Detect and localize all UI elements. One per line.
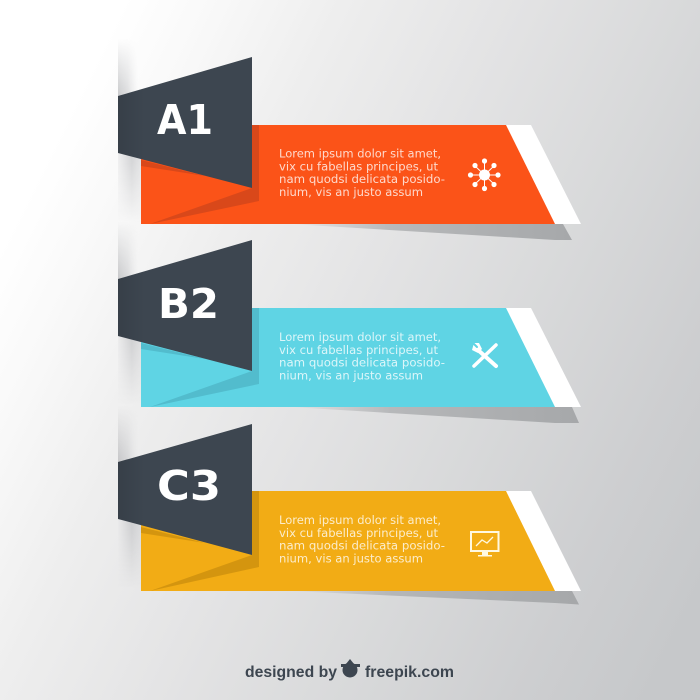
text B2: nium, vis an justo assum bbox=[279, 369, 423, 382]
text C3: vix cu fabellas principes, ut bbox=[279, 527, 439, 540]
credit text left: designed by bbox=[245, 664, 337, 681]
ground shadow B2 bbox=[290, 407, 579, 423]
banner B2 bbox=[118, 222, 581, 423]
text C3: nium, vis an justo assum bbox=[279, 552, 423, 565]
text A1: nam quodsi delicata posido- bbox=[279, 173, 445, 186]
text B2: nam quodsi delicata posido- bbox=[279, 356, 445, 370]
label A1: A1 bbox=[157, 96, 213, 144]
blue ribbon B2 bbox=[141, 308, 555, 407]
text B2: vix cu fabellas principes, ut bbox=[279, 344, 439, 357]
label B2: B2 bbox=[158, 280, 219, 328]
text A1: vix cu fabellas principes, ut bbox=[279, 160, 439, 173]
fold shadow strip A1 bbox=[118, 48, 141, 207]
text C3: Lorem ipsum dolor sit amet, bbox=[279, 514, 441, 527]
banner C3 bbox=[118, 406, 581, 604]
fold shadows A1 bbox=[141, 125, 259, 224]
white ribbon edge B2 bbox=[500, 308, 581, 407]
dark tab B2 bbox=[118, 240, 252, 371]
footer credit bbox=[245, 659, 454, 681]
fold shadow strip B2 bbox=[118, 232, 141, 388]
icon: network bbox=[468, 158, 501, 191]
text A1: Lorem ipsum dolor sit amet, bbox=[279, 148, 441, 160]
fold shadows C3 bbox=[141, 491, 259, 591]
icon: monitor with chart bbox=[471, 532, 498, 556]
dark tab C3 bbox=[118, 424, 252, 555]
white ribbon edge C3 bbox=[500, 491, 581, 591]
white ribbon edge A1 bbox=[500, 125, 581, 224]
icon: wrench and screwdriver bbox=[472, 343, 496, 366]
fold shadows B2 bbox=[141, 308, 259, 407]
icon: freepik mascot bbox=[341, 659, 360, 678]
fold shadow strip C3 bbox=[118, 417, 141, 568]
orange ribbon A1 bbox=[141, 125, 555, 224]
credit text right: freepik.com bbox=[365, 664, 454, 681]
ground shadow A1 bbox=[290, 224, 572, 240]
banner A1 bbox=[118, 39, 581, 240]
text B2: Lorem ipsum dolor sit amet, bbox=[279, 331, 441, 344]
ground shadow C3 bbox=[290, 591, 579, 604]
text C3: nam quodsi delicata posido- bbox=[279, 540, 445, 552]
text A1: nium, vis an justo assum bbox=[279, 186, 423, 199]
yellow ribbon C3 bbox=[141, 491, 555, 591]
label C3: C3 bbox=[157, 462, 221, 510]
dark tab A1 bbox=[118, 57, 252, 188]
